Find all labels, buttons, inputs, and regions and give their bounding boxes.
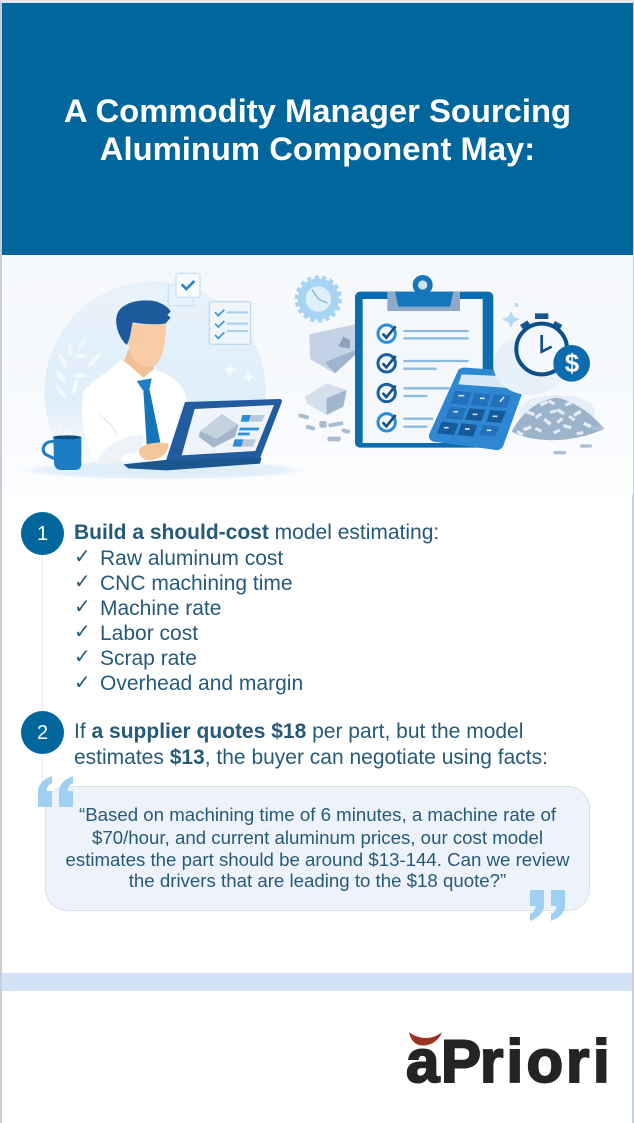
logo swoosh <box>409 1032 442 1045</box>
step 1 number badge <box>21 512 64 555</box>
illustration: commodity manager with cost checklist <box>2 255 633 495</box>
timeline connector <box>42 555 43 790</box>
step 1 checklist: Machine rate <box>100 597 221 620</box>
quote text: estimates the part should be around $13-144. Can we review <box>65 849 570 870</box>
quote text <box>65 804 570 891</box>
clipboard, calculator, stopwatch and scrap <box>296 275 604 454</box>
step 1 checklist: ✓ <box>74 544 91 568</box>
clipboard <box>355 292 493 448</box>
floating check card <box>168 285 193 306</box>
step 1 checklist: CNC machining time <box>100 572 293 595</box>
gear clock <box>298 278 339 320</box>
step 1 <box>21 512 439 695</box>
step 1 checklist: ✓ <box>74 644 91 668</box>
step 2 number badge <box>21 711 64 754</box>
step 1 checklist: Scrap rate <box>100 647 197 670</box>
step 1 checklist: ✓ <box>74 619 91 643</box>
title <box>64 92 571 167</box>
step 1 checklist: ✓ <box>74 670 91 694</box>
calculator <box>429 368 528 450</box>
hand <box>139 443 169 460</box>
dollar sign: $ <box>565 348 580 378</box>
leaves <box>54 339 102 400</box>
step 2 text: If a supplier quotes $18 per part, but the model <box>74 720 523 743</box>
person at laptop <box>13 273 313 502</box>
step 2 number badge: 2 <box>37 722 48 744</box>
mug <box>53 437 81 470</box>
step 2 text: estimates $13, the buyer can negotiate using facts: <box>74 746 548 769</box>
title: A Commodity Manager Sourcing <box>64 92 571 129</box>
title: Aluminum Component May: <box>100 130 535 167</box>
step 1 checklist <box>74 544 303 695</box>
floating checklist <box>209 302 251 344</box>
logo: aPriori <box>406 1028 610 1089</box>
step 1 checklist: Overhead and margin <box>100 672 303 695</box>
quote callout <box>45 786 590 911</box>
metal blocks <box>309 324 355 373</box>
scrap pile <box>518 395 595 428</box>
quote text: the drivers that are leading to the $18 quote?” <box>129 870 506 891</box>
hair <box>116 300 171 345</box>
stopwatch <box>493 335 567 395</box>
step 1 checklist: Raw aluminum cost <box>100 547 283 570</box>
step 2 <box>21 711 548 769</box>
quote text: “Based on machining time of 6 minutes, a machine rate of <box>79 804 556 825</box>
laptop <box>165 399 282 463</box>
header banner <box>2 3 633 255</box>
step 2 text <box>74 720 548 769</box>
icon: closing quote mark <box>530 890 565 921</box>
dollar coin <box>553 345 590 382</box>
step 1 checklist: Labor cost <box>100 622 198 645</box>
step 1 number badge: 1 <box>37 523 48 545</box>
quote text: $70/hour, and current aluminum prices, our cost model <box>92 827 543 848</box>
step 1 checklist: ✓ <box>74 569 91 593</box>
footer band <box>2 973 632 991</box>
neck and face <box>124 350 154 378</box>
icon: opening quote mark <box>38 776 73 807</box>
tie <box>137 378 152 390</box>
step 1 heading: Build a should-cost model estimating: <box>74 521 439 544</box>
step 1 checklist: ✓ <box>74 594 91 618</box>
shirt <box>82 361 187 462</box>
